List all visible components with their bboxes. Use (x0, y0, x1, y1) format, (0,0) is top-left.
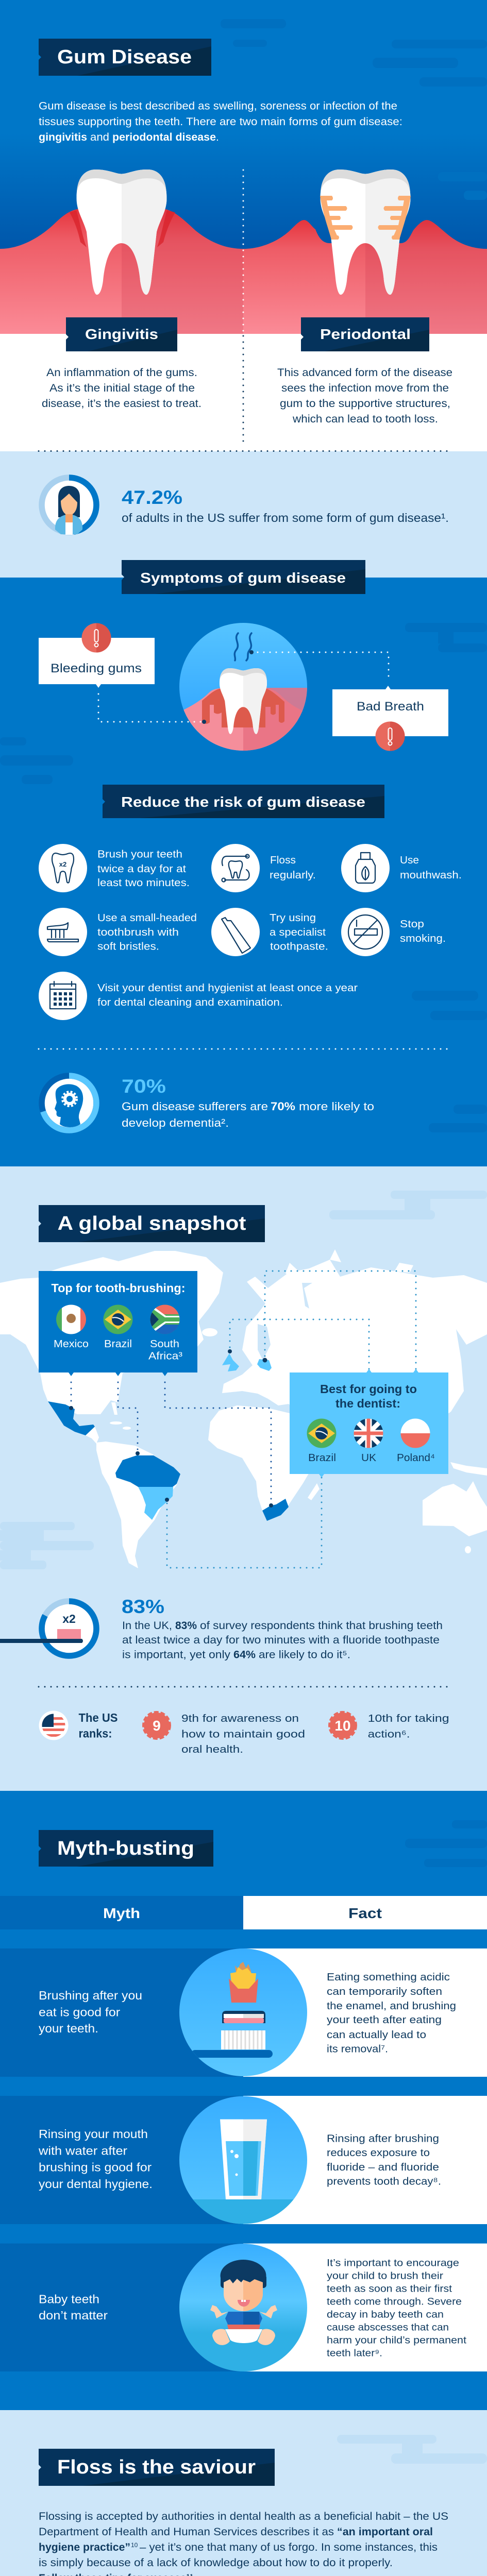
tip: floss regularly (211, 844, 316, 892)
floss intro text: “an important oral (337, 2526, 433, 2538)
tip: floss regularly: Floss (270, 855, 296, 866)
fact text: cause abscesses that can (327, 2322, 449, 2333)
statistic text: 83%: is important, yet only (122, 1649, 231, 1661)
tip: stop smoking (341, 908, 446, 956)
table header: myth and fact: Fact (348, 1905, 382, 1921)
US rankings (39, 1710, 449, 1755)
panel: top for tooth-brushing (39, 1271, 197, 1376)
fact text: your child to brush their (327, 2270, 444, 2281)
floss intro text: – yet it’s one that many of us forgo. In some instances, this (140, 2541, 438, 2553)
fact text: the enamel, and brushing (327, 2001, 456, 2012)
connector lines to dentist-visit countries (165, 1271, 416, 1568)
gingivitis column: As it’s the initial stage of the (49, 382, 195, 394)
floss intro text: Flossing is accepted by authorities in dental health as a beneficial habit – the US (39, 2511, 448, 2522)
floss intro text: Department of Health and Human Services describes it as (39, 2526, 334, 2538)
US rankings: how to maintain good (181, 1729, 305, 1740)
myth text (38, 2127, 153, 2191)
illustration: glass of water (179, 2096, 307, 2224)
panel: best for going to the dentist: Poland⁴ (397, 1452, 435, 1464)
ring chart with toothbrush icon (0, 1601, 96, 1656)
statistic text: of adults in the US suffer from some form of gum disease¹. (122, 511, 449, 524)
heading: Floss is the saviour: Floss is the saviour (57, 2456, 256, 2478)
statistic text: 83%: In the UK, (122, 1620, 172, 1632)
periodontal column: sees the infection move from the (281, 382, 449, 394)
intro text: gingivitis (39, 131, 87, 143)
badge: 9th (143, 1712, 170, 1739)
US rankings: ranks: (78, 1727, 112, 1740)
floss intro text: hygiene practice” (39, 2541, 130, 2553)
illustration: baby (179, 2244, 307, 2371)
fact text (327, 1972, 456, 2055)
myth text: eat is good for (39, 2005, 120, 2019)
heading: Gum Disease: Gum Disease (57, 46, 192, 68)
panel: top for tooth-brushing: Top for tooth-brushing: (52, 1281, 186, 1295)
myth text: don’t matter (39, 2309, 108, 2322)
fact text: prevents tooth decay⁸. (327, 2176, 441, 2188)
myth text: Baby teeth (39, 2293, 99, 2306)
table header: myth and fact (0, 1896, 487, 1929)
panel: 47.2% statistic (0, 451, 487, 578)
fact text: fluoride – and fluoride (327, 2162, 439, 2173)
panel: best for going to the dentist: UK (361, 1452, 377, 1464)
tip: stop smoking: Stop (400, 919, 424, 930)
periodontal column: which can lead to tooth loss. (292, 413, 438, 425)
gingivitis column: disease, it’s the easiest to treat. (42, 398, 201, 410)
illustration: tooth in circle with bleeding gums and odour (175, 623, 310, 752)
statistic text: 83%: are likely to do it⁵. (259, 1649, 350, 1661)
statistic text: 83%: 83% (175, 1620, 197, 1632)
intro text: periodontal disease (112, 131, 216, 143)
callout: bleeding gums (39, 623, 206, 724)
floss intro text: 10 (131, 2541, 138, 2549)
panel: a global snapshot (0, 1166, 487, 1791)
flag: Poland (400, 1418, 430, 1448)
heading: Symptoms of gum disease: Symptoms of gum disease (140, 570, 346, 586)
heading: Gum Disease (39, 39, 211, 76)
fact text (327, 2133, 441, 2188)
tip: annual dental visit: Visit your dentist and hygienist at least once a year (97, 982, 358, 994)
fact text: decay in baby teeth can (327, 2309, 444, 2320)
US rankings: action⁶. (368, 1729, 410, 1740)
tip: small-headed toothbrush: Use a small-headed (97, 912, 197, 924)
tip: annual dental visit (39, 972, 358, 1020)
tip: use mouthwash: mouthwash. (400, 870, 462, 881)
flag: USA (39, 1710, 68, 1740)
ring chart with toothbrush icon: x2 (62, 1612, 76, 1625)
periodontal column (277, 317, 452, 425)
statistic text: 83%: at least twice a day for two minutes with a fluoride toothpaste (122, 1634, 440, 1646)
tip: small-headed toothbrush (39, 908, 197, 956)
callout: bad breath: Bad Breath (357, 700, 424, 714)
panel: best for going to the dentist: Brazil (308, 1452, 336, 1464)
statistic text: 70%: develop dementia². (122, 1116, 229, 1129)
panel: floss is the saviour (0, 2410, 487, 2576)
heading: Reduce the risk of gum disease: Reduce the risk of gum disease (121, 794, 365, 810)
tip: specialist toothpaste (211, 908, 328, 956)
tip: specialist toothpaste: a specialist (270, 927, 326, 938)
ring chart with woman icon (42, 478, 96, 535)
fact text (327, 2258, 467, 2359)
fact text: teeth later⁹. (327, 2348, 382, 2359)
illustration: inflamed gums and tooth (gingivitis) (0, 170, 243, 334)
statistic text: 83% (122, 1596, 443, 1661)
statistic text: 83%: 83% (122, 1596, 164, 1617)
panel: top for tooth-brushing: South (150, 1338, 179, 1350)
panel: top for tooth-brushing: Africa³ (148, 1351, 182, 1362)
tip: use mouthwash (341, 844, 462, 892)
tip: specialist toothpaste: Try using (270, 912, 316, 924)
fact text: can actually lead to (327, 2029, 426, 2041)
connector lines to tooth-brushing countries (69, 1382, 273, 1507)
tip: annual dental visit: for dental cleaning and examination. (97, 997, 283, 1008)
fact text: teeth come through. Severe (327, 2296, 462, 2307)
tip: use mouthwash: Use (400, 855, 419, 866)
fact text: Rinsing after brushing (327, 2133, 439, 2144)
myth text (39, 1989, 142, 2035)
tip: brush twice a day: Brush your teeth (97, 849, 182, 860)
myth row: baby teeth (0, 2244, 487, 2371)
fact text: reduces exposure to (327, 2147, 430, 2159)
periodontal column: This advanced form of the disease (277, 367, 452, 379)
gingivitis column (42, 317, 201, 410)
intro text: Gum disease is best described as swelling, soreness or infection of the (39, 100, 397, 112)
tip: brush twice a day (39, 844, 190, 892)
fact text: It’s important to encourage (327, 2258, 459, 2269)
intro text (39, 100, 402, 143)
tip: specialist toothpaste: toothpaste. (270, 941, 328, 953)
heading: A global snapshot (39, 1205, 265, 1242)
intro text: tissues supporting the teeth. There are two main forms of gum disease: (39, 116, 402, 128)
statistic text: 70%: 70% (122, 1076, 166, 1097)
US rankings: The US (78, 1711, 117, 1724)
fact text: harm your child’s permanent (327, 2335, 467, 2346)
fact text: your teeth after eating (327, 2014, 442, 2026)
myth row: rinsing after brushing (0, 2096, 487, 2230)
panel: best for going to the dentist: the dentist: (335, 1397, 400, 1410)
badge: 10th (329, 1712, 356, 1739)
heading: Symptoms of gum disease (122, 560, 365, 594)
statistic text: 83%: of survey respondents think that brushing teeth (200, 1620, 443, 1632)
flag: Brazil (307, 1419, 336, 1448)
myth text: with water after (38, 2144, 127, 2158)
gingivitis column: Gingivitis (85, 326, 158, 342)
flag: UK (354, 1418, 383, 1448)
floss intro text: is simply because of a lack of knowledge about how to do it properly. (39, 2557, 393, 2569)
tip: brush twice a day: least two minutes. (97, 877, 190, 889)
heading: Reduce the risk of gum disease (103, 785, 384, 818)
myth text: brushing is good for (39, 2161, 152, 2174)
table header: myth and fact: Myth (103, 1905, 140, 1921)
fact text: teeth as soon as their first (327, 2283, 452, 2295)
statistic text: 47.2% (122, 487, 182, 508)
gingivitis column: An inflammation of the gums. (46, 367, 197, 379)
panel: top for tooth-brushing: Brazil (104, 1338, 132, 1350)
panel: best for going to the dentist: Best for going to (320, 1382, 417, 1396)
flag: Brazil (103, 1304, 133, 1334)
panel: top for tooth-brushing: Mexico (54, 1338, 89, 1350)
periodontal column: gum to the supportive structures, (280, 398, 450, 410)
illustration: receded gums and decayed tooth (periodontal) (243, 170, 487, 334)
panel: types of gum disease (0, 317, 487, 451)
heading: A global snapshot: A global snapshot (58, 1213, 246, 1234)
heading: Myth-busting (39, 1830, 213, 1867)
world map (0, 1249, 487, 1568)
panel: gum disease intro (0, 0, 487, 334)
panel: best for going to the dentist (290, 1369, 448, 1478)
tip: brush twice a day: x2 (59, 860, 66, 868)
panel: symptoms and risk reduction (0, 560, 487, 1166)
US rankings: 9th for awareness on (181, 1713, 299, 1724)
heading: Floss is the saviour (39, 2449, 275, 2486)
intro text: and (90, 131, 109, 143)
heading: Myth-busting: Myth-busting (57, 1838, 194, 1859)
callout: bad breath (249, 650, 448, 751)
tip: small-headed toothbrush: soft bristles. (97, 941, 159, 953)
myth text: Rinsing your mouth (39, 2127, 148, 2141)
statistic text: 70%: Gum disease sufferers are (122, 1100, 268, 1113)
tip: brush twice a day: twice a day for at (97, 863, 186, 875)
ring chart with head icon (42, 1076, 96, 1130)
tip: stop smoking: smoking. (400, 933, 446, 944)
tip: floss regularly: regularly. (270, 870, 316, 881)
US rankings: oral health. (181, 1744, 243, 1755)
panel: myth-busting (0, 1791, 487, 2410)
fact text: its removal⁷. (327, 2044, 388, 2055)
flag: Mexico (56, 1304, 86, 1334)
badge: 10th: 10 (334, 1718, 351, 1734)
floss intro text (39, 2511, 448, 2576)
statistic text: 83%: 64% (233, 1649, 256, 1661)
periodontal column: Periodontal (320, 326, 411, 342)
intro text: . (216, 131, 219, 143)
myth text: your dental hygiene. (39, 2177, 153, 2191)
statistic text (122, 487, 449, 524)
highlighted countries (48, 1353, 289, 1521)
statistic text: 70% (122, 1076, 374, 1129)
illustration: fries and toothbrush (179, 1948, 307, 2076)
myth text (39, 2293, 108, 2322)
fact text: can temporarily soften (327, 1986, 442, 1997)
fact text: Eating something acidic (327, 1972, 450, 1983)
badge: 9th: 9 (153, 1718, 161, 1734)
statistic text: 70%: 70% (271, 1100, 295, 1113)
flag: South Africa (150, 1304, 179, 1334)
myth text: your teeth. (39, 2022, 98, 2035)
myth row: brushing after eating (0, 1948, 487, 2077)
tip: small-headed toothbrush: toothbrush with (97, 927, 179, 938)
callout: bleeding gums: Bleeding gums (51, 662, 142, 675)
US rankings: 10th for taking (368, 1713, 449, 1724)
myth text: Brushing after you (39, 1989, 142, 2002)
statistic text: 70%: more likely to (299, 1100, 374, 1113)
